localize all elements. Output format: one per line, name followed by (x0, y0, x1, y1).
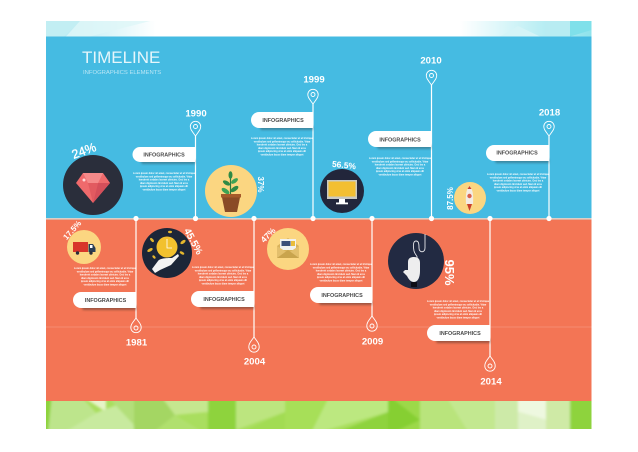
milestone 2004: INFOGRAPHICS (203, 297, 245, 303)
milestone 2010 (368, 56, 442, 221)
milestone 1999: hendrerit sodales laoreet ultricies. Orci leo a (257, 144, 308, 147)
milestone 2009: INFOGRAPHICS (321, 293, 363, 299)
milestone 2014: vestibulum sed pellentesque eu sollicitudin. Vitae (430, 303, 487, 306)
milestone 1999: diam dignissim tincidunt sed. Nam id eros (258, 147, 307, 150)
milestone 2010: 2010 (420, 56, 442, 66)
milestone 1990: diam dignissim tincidunt sed. Nam id eros (140, 182, 189, 185)
milestone 2018: hendrerit sodales laoreet ultricies. Orci leo a (493, 180, 544, 183)
percent 47%: 47% (258, 225, 278, 245)
percent 87.5%: 87.5% (446, 187, 455, 210)
milestone 2004: vestibulum lacus diam tempor aliquet (202, 282, 245, 286)
timeline axis (46, 218, 592, 220)
milestone 1999 (251, 74, 325, 221)
milestone 1999: vestibulum lacus diam tempor aliquet (261, 154, 304, 156)
milestone 2009: Lorem ipsum dolor sit amet, consectetur ut ut tristique (310, 263, 373, 266)
milestone 2010: Lorem ipsum dolor sit amet, consectetur ut ut tristique (369, 157, 432, 160)
milestone 2010: vestibulum lacus diam tempor aliquet (379, 174, 422, 176)
subtitle: INFOGRAPHICS ELEMENTS (83, 70, 161, 76)
milestone 2018 (486, 108, 561, 221)
milestone 2010: vestibulum sed pellentesque eu sollicitudin. Vitae (372, 160, 429, 163)
percent 56.5%: 56.5% (331, 159, 357, 171)
milestone 1990: Lorem ipsum dolor sit amet, consectetur ut ut tristique (133, 172, 196, 175)
panel: orange lower section (46, 220, 592, 402)
milestone 1981: Lorem ipsum dolor sit amet, consectetur ut ut tristique (74, 267, 137, 270)
top decorative strip (46, 21, 592, 36)
milestone 1999: Lorem ipsum dolor sit amet, consectetur ut ut tristique (251, 137, 314, 140)
milestone 2010: hendrerit sodales laoreet ultricies. Orci leo a (375, 164, 426, 167)
milestone 2018: Lorem ipsum dolor sit amet, consectetur ut ut tristique (487, 173, 550, 176)
milestone 1981 (73, 216, 148, 348)
milestone 2018: ipsum adipiscing cras at enim aliquam elit (494, 186, 542, 189)
milestone 2004: ipsum adipiscing cras at enim aliquam elit (199, 279, 247, 282)
milestone 1999: ipsum adipiscing cras at enim aliquam elit (258, 150, 306, 153)
milestone 2014: ipsum adipiscing cras at enim aliquam elit (434, 313, 482, 316)
milestone 1981: vestibulum lacus diam tempor aliquet (84, 284, 127, 286)
percent 45.5%: 45.5% (181, 227, 204, 257)
title: TIMELINE (82, 48, 160, 67)
milestone 2009 (310, 216, 383, 348)
milestone 2004 (191, 216, 266, 368)
milestone 1999: INFOGRAPHICS (262, 118, 304, 124)
milestone 2010: ipsum adipiscing cras at enim aliquam elit (376, 170, 424, 173)
milestone 2014: INFOGRAPHICS (439, 331, 481, 337)
milestone 1981: vestibulum sed pellentesque eu sollicitudin. Vitae (77, 270, 134, 273)
milestone 1990: hendrerit sodales laoreet ultricies. Orci leo a (139, 179, 190, 182)
milestone 2018: vestibulum sed pellentesque eu sollicitudin. Vitae (490, 176, 547, 179)
panel: blue upper section (46, 36, 592, 218)
milestone 2009: diam dignissim tincidunt sed. Nam id eros (317, 273, 366, 276)
milestone 2018: diam dignissim tincidunt sed. Nam id eros (494, 183, 543, 186)
milestone 1990: vestibulum sed pellentesque eu sollicitudin. Vitae (136, 175, 193, 178)
milestone 1990: vestibulum lacus diam tempor aliquet (143, 188, 186, 192)
milestone 2018: 2018 (539, 108, 561, 118)
milestone 2004: 2004 (244, 356, 266, 368)
milestone 1981: ipsum adipiscing cras at enim aliquam elit (81, 280, 129, 283)
icon: envelope (267, 228, 309, 270)
milestone 1990: ipsum adipiscing cras at enim aliquam elit (140, 185, 188, 188)
icon: potted plant (205, 165, 257, 217)
milestone 2009: ipsum adipiscing cras at enim aliquam elit (317, 276, 365, 279)
milestone 2009: vestibulum lacus diam tempor aliquet (320, 280, 363, 282)
icon: delivery truck (67, 230, 101, 264)
milestone 1981: diam dignissim tincidunt sed. Nam id eros (81, 277, 130, 280)
percent 37%: 37% (256, 176, 265, 193)
milestone 2018: INFOGRAPHICS (496, 150, 538, 156)
milestone 2004: Lorem ipsum dolor sit amet, consectetur ut ut tristique (192, 266, 255, 269)
percent 24%: 24% (70, 140, 98, 162)
milestone 2014: Lorem ipsum dolor sit amet, consectetur ut ut tristique (427, 300, 490, 303)
milestone 2010: diam dignissim tincidunt sed. Nam id eros (376, 167, 425, 170)
milestone 1999: vestibulum sed pellentesque eu sollicitudin. Vitae (254, 140, 311, 143)
milestone 1990: 1990 (185, 108, 207, 120)
milestone 1981: INFOGRAPHICS (85, 298, 127, 304)
milestone 1999: 1999 (303, 74, 325, 86)
milestone 2009: vestibulum sed pellentesque eu sollicitudin. Vitae (313, 266, 370, 269)
icon: monitor (320, 169, 364, 213)
milestone 1990 (133, 108, 207, 221)
milestone 2014: vestibulum lacus diam tempor aliquet (437, 316, 480, 320)
milestone 2009: 2009 (362, 336, 383, 348)
icon: hand on computer mouse (388, 233, 444, 289)
percent 95%: 95% (442, 259, 457, 286)
icon: ruby diamond (63, 155, 123, 215)
milestone 2009: hendrerit sodales laoreet ultricies. Orci leo a (316, 270, 367, 273)
milestone 2014 (427, 216, 502, 388)
milestone 2014: 2014 (480, 376, 502, 388)
milestone 2014: hendrerit sodales laoreet ultricies. Orci leo a (433, 307, 484, 310)
milestone 2004: vestibulum sed pellentesque eu sollicitudin. Vitae (195, 269, 252, 272)
milestone 2004: hendrerit sodales laoreet ultricies. Orci leo a (198, 273, 249, 276)
milestone 2014: diam dignissim tincidunt sed. Nam id eros (434, 310, 483, 313)
milestone 2018: vestibulum lacus diam tempor aliquet (497, 190, 540, 192)
milestone 2004: diam dignissim tincidunt sed. Nam id eros (199, 276, 248, 279)
milestone 1990: INFOGRAPHICS (143, 152, 185, 158)
panel: green polygon footer (46, 401, 592, 429)
milestone 1981: hendrerit sodales laoreet ultricies. Orci leo a (80, 274, 131, 277)
icon: rocket (454, 182, 486, 214)
milestone 2010: INFOGRAPHICS (379, 138, 421, 144)
percent 17.5%: 17.5% (61, 219, 83, 242)
milestone 1981: 1981 (126, 338, 148, 348)
icon: hand holding clock and coins (142, 228, 192, 278)
timeline infographic (46, 21, 592, 429)
